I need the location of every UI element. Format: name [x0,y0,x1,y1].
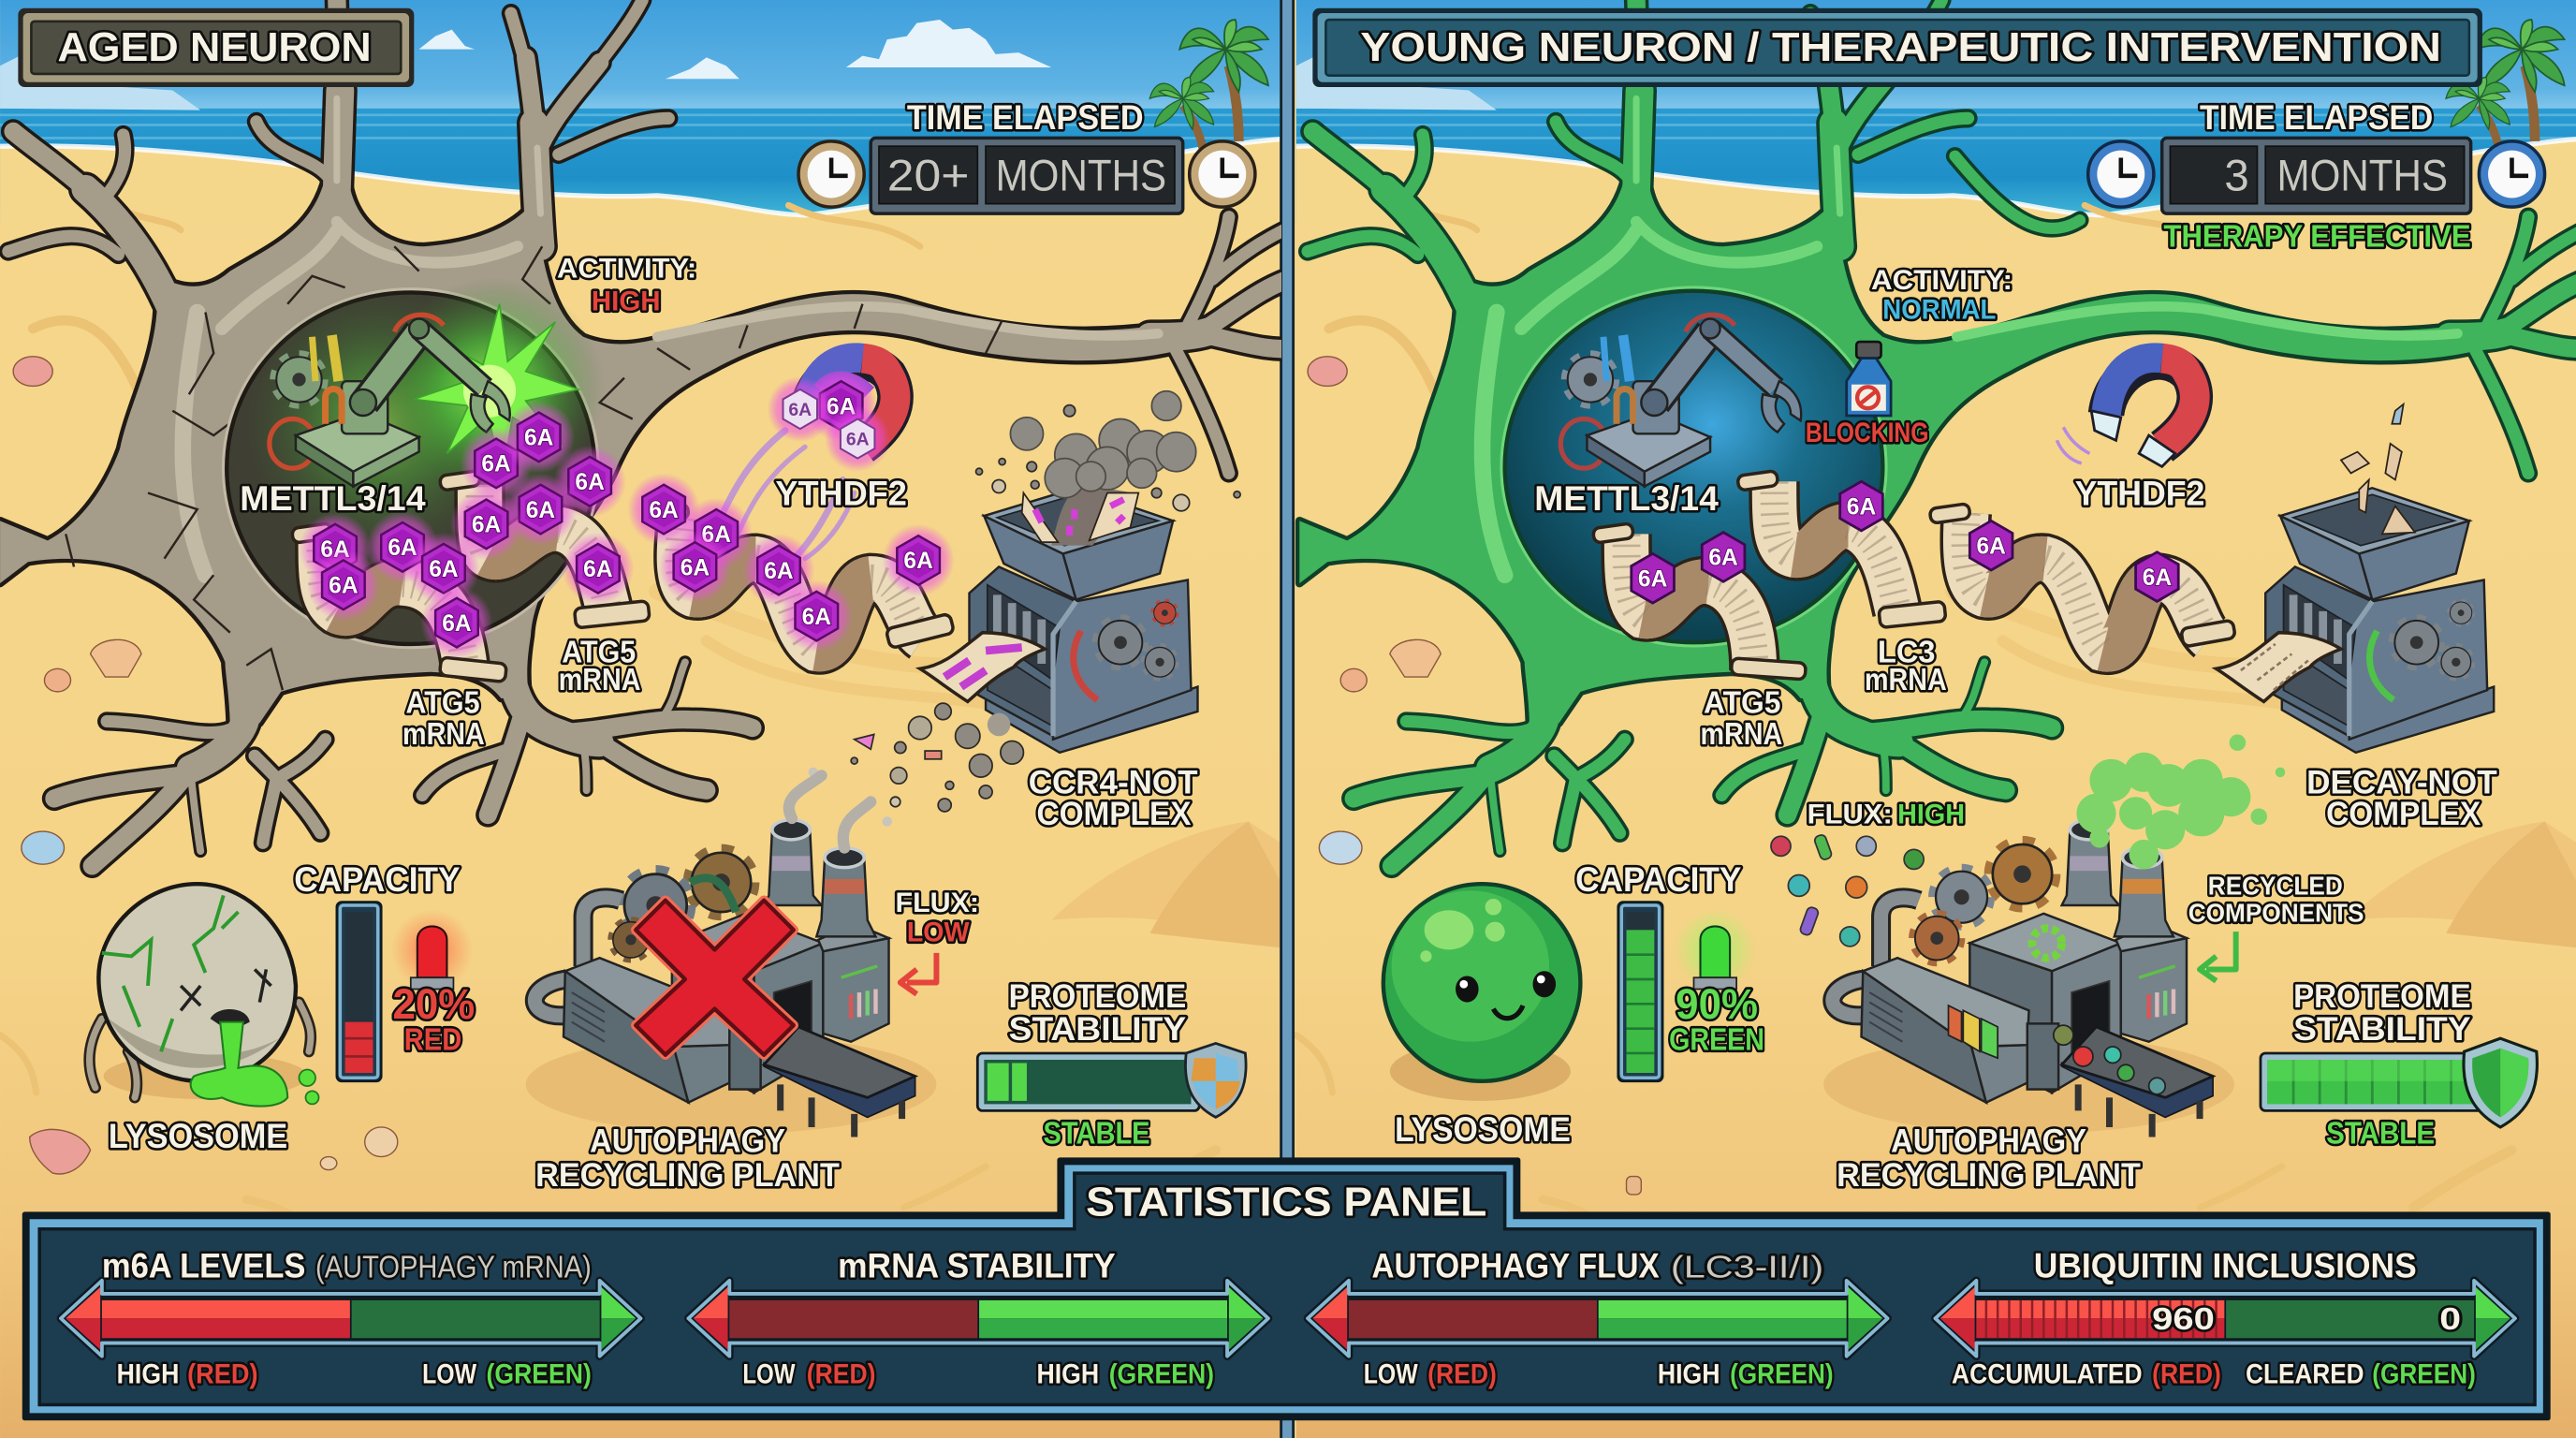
slime drip [191,1022,287,1107]
smoke from shredder left [1010,391,1196,546]
labels: molecules left: COMPLEX [1036,796,1192,832]
capacity gauge: young: GREEN [1669,1022,1764,1057]
6A markers left: 6A [802,605,831,630]
6A markers left [299,370,955,659]
clock icon [2088,141,2154,207]
conveyor items [2054,1025,2165,1094]
clock icon [2479,141,2545,207]
6A markers left: 6A [524,426,554,451]
mRNA scrolls left [291,471,954,682]
smoke grey [789,775,871,848]
plant labels left: FLUX: [896,888,979,918]
6A markers left: 6A [329,574,359,599]
stat: m6A levels: (RED) [187,1359,258,1390]
labels: molecules right: METTL3/14 [1534,479,1719,518]
labels: molecules left [240,475,1198,832]
stat: autophagy flux: HIGH [1658,1359,1720,1390]
autophagy plant: aged, halted [526,775,936,1137]
stat: mRNA stability: (RED) [807,1359,875,1390]
stat: ubiquitin inclusions: (RED) [2152,1359,2221,1390]
stat: mRNA stability [688,1247,1268,1390]
6A markers right: 6A [1638,567,1668,593]
stat: ubiquitin inclusions: UBIQUITIN INCLUSIONS [2034,1247,2417,1285]
shield icon [1185,1043,1246,1117]
proteome stability: aged: STABLE [1044,1116,1150,1151]
colored blocks [1949,1005,1998,1058]
stat: mRNA stability: LOW [742,1359,796,1390]
6A markers left: 6A [903,549,933,574]
stat: m6A levels [61,1247,641,1390]
activity label right: ACTIVITY: [1871,265,2012,296]
activity label left: ACTIVITY: [557,254,696,285]
shield icon [2464,1038,2537,1127]
labels: molecules right: LC3 [1878,635,1935,669]
labels: molecules right: COMPLEX [2326,796,2481,832]
labels: molecules left: mRNA [402,717,485,752]
stat: autophagy flux: (RED) [1427,1359,1497,1390]
clock icon [1190,141,1255,207]
6A markers left: 6A [583,557,613,582]
labels: molecules right: ATG5 [1704,686,1781,721]
6A markers left: 6A [788,401,812,420]
lysosome: aged, cracked and leaking [89,884,319,1155]
stat: autophagy flux: AUTOPHAGY FLUX [1372,1247,1660,1285]
plant labels right [1808,799,2364,1194]
banner: aged neuron [18,8,414,87]
proteome stability: young: STABLE [2326,1116,2435,1151]
6A markers right: 6A [1847,494,1876,520]
plant labels right: COMPONENTS [2188,899,2364,928]
title right: YOUNG NEURON / THERAPEUTIC INTERVENTION [1360,24,2441,70]
labels: molecules left: YTHDF2 [775,475,907,513]
neuron: young, healthy green [1299,0,2576,866]
6A markers left: 6A [846,431,870,450]
mRNA scrolls right [1592,471,2235,680]
stat: ubiquitin inclusions: 960 [2152,1302,2215,1337]
6A markers left: 6A [320,537,350,563]
labels: molecules left: CCR4-NOT [1029,765,1198,801]
banner: young neuron [1312,8,2482,87]
double arrow bar [1935,1281,2515,1357]
plant labels right: AUTOPHAGY [1891,1123,2086,1159]
shredder: decay-not young [2265,488,2494,753]
timer: aged: TIME ELAPSED [907,98,1144,137]
double arrow bar [1308,1281,1888,1357]
robot arm: METTL3/14 young [1560,315,1801,486]
stat: ubiquitin inclusions [1935,1247,2515,1390]
proteome stability: aged: STABILITY [1009,1011,1186,1048]
proteome stability: young: STABILITY [2293,1011,2471,1048]
labels: molecules right: YTHDF2 [2075,475,2204,513]
capacity gauge: young: 90% [1676,980,1758,1028]
stat: ubiquitin inclusions: 0 [2439,1302,2461,1337]
capacity gauge: young [1575,860,1764,1081]
green smoke [2076,734,2285,869]
6A markers left: 6A [575,470,605,495]
stat: autophagy flux: LOW [1364,1359,1418,1390]
timer: young: MONTHS [2277,152,2448,201]
robot arm: METTL3/14 aged [270,315,510,486]
nucleus: young, blue [1500,286,1888,647]
timer: young: 3 [2224,152,2249,201]
6A markers right [1632,481,2178,603]
recycled components [1771,833,1924,946]
capacity gauge: aged: RED [404,1022,461,1057]
stat: m6A levels: m6A LEVELS [102,1247,305,1285]
6A markers left: 6A [764,559,794,584]
plant labels right: RECYCLED [2208,872,2343,901]
6A markers right: 6A [1708,546,1738,571]
blocking label: BLOCKING [1806,418,1928,448]
activity label left: HIGH [592,286,661,317]
clock icon [798,141,864,207]
6A markers left: 6A [481,452,511,477]
6A markers left: 6A [702,522,731,548]
magnet trails left [710,431,855,566]
left panel background: sky, sea and beach [0,0,1298,1438]
6A markers left: 6A [827,394,856,419]
proteome stability: young [2261,978,2537,1151]
nucleus: aged, dark with green glow [222,287,600,649]
6A markers left: 6A [442,611,472,637]
plant labels right: RECYCLING PLANT [1837,1157,2141,1194]
red gear and arrow [1074,601,1177,700]
lysosome label: LYSOSOME [1395,1110,1571,1149]
exiting scroll left [920,633,1045,701]
scrap paper in hopper left [1022,493,1138,542]
green gear emblem [2032,929,2062,958]
labels: molecules right: DECAY-NOT [2306,765,2497,801]
proteome stability: aged: PROTEOME [1009,978,1186,1015]
stat: ubiquitin inclusions: (GREEN) [2372,1359,2476,1390]
stat: mRNA stability: mRNA STABILITY [838,1247,1116,1285]
statistics panel [24,1160,2548,1418]
timer: young [2088,98,2545,254]
plant labels left: RECYCLING PLANT [535,1157,840,1194]
stat: ubiquitin inclusions: CLEARED [2246,1359,2364,1390]
autophagy plant: young, running [1771,734,2285,1137]
right panel background: sky, sea and beach [1296,0,2576,1438]
therapy label: THERAPY EFFECTIVE [2163,219,2471,254]
timer: aged [798,98,1255,213]
proteome stability: aged [977,978,1246,1151]
stat: mRNA stability: HIGH [1036,1359,1099,1390]
exiting scroll right [2217,633,2341,701]
stat: m6A levels: HIGH [117,1359,179,1390]
activity label left [557,254,696,317]
stat: m6A levels: LOW [422,1359,477,1390]
timer: aged: MONTHS [996,152,1166,201]
labels: molecules right: mRNA [1865,663,1947,697]
shredder: CCR4-NOT aged [970,488,1197,753]
labels: molecules left: ATG5 [406,686,480,721]
6A markers right: 6A [1976,534,2006,559]
arrow: low flux [900,953,936,994]
double arrow bar [688,1281,1268,1357]
shells [13,357,1641,1195]
6A markers left: 6A [388,536,417,561]
neuron: aged, cracked grey [0,0,1298,866]
icon: green energy burst [381,278,605,501]
centre divider [1280,0,1295,1438]
plant labels right: HIGH [1897,799,1965,829]
arrow: recycled return [2200,932,2236,981]
alarm green [1674,909,1756,990]
plant labels right: FLUX: [1808,799,1893,829]
icon: magnet YTHDF2 left [807,358,896,447]
proteome stability: young: PROTEOME [2293,978,2471,1015]
capacity gauge: aged: 20% [393,980,475,1028]
stat: m6A levels: (AUTOPHAGY mRNA) [315,1251,592,1285]
labels: molecules left: METTL3/14 [240,479,426,518]
timer: aged: 20+ [887,152,970,201]
stat: ubiquitin inclusions: ACCUMULATED [1952,1359,2143,1390]
labels: molecules right [1534,475,2497,832]
capacity gauge: aged: CAPACITY [294,860,460,899]
stat: autophagy flux [1308,1247,1888,1390]
6A markers right: 6A [2143,565,2172,591]
double arrow bar [61,1281,641,1357]
red cross [636,901,794,1055]
panel heading: STATISTICS PANEL [1086,1180,1486,1225]
stat: autophagy flux: (LC3-II/I) [1671,1251,1823,1285]
6A markers left: 6A [472,513,502,538]
activity label right [1871,265,2012,325]
plant labels left: LOW [907,917,970,948]
plant labels left: AUTOPHAGY [590,1123,785,1159]
timer: young: TIME ELAPSED [2200,98,2433,137]
capacity gauge: aged [294,860,475,1081]
labels: molecules left: ATG5 [562,635,636,669]
debris left [809,405,1240,827]
stat: m6A levels: (GREEN) [487,1359,592,1390]
capacity gauge: young: CAPACITY [1575,860,1741,899]
stat: autophagy flux: (GREEN) [1730,1359,1834,1390]
plant labels left [535,888,979,1194]
labels: molecules right: mRNA [1701,717,1782,752]
labels: molecules left: mRNA [559,663,641,697]
icon: blocker bottle [1806,342,1928,448]
lysosome label: LYSOSOME [109,1117,287,1155]
green arrow [2370,631,2393,700]
activity label right: NORMAL [1882,294,1996,325]
title left: AGED NEURON [57,24,372,70]
icon: magnet YTHDF2 right [2056,358,2195,466]
6A markers left: 6A [649,498,679,523]
lysosome: young, smiling [1383,884,1580,1149]
alarm red [391,909,474,990]
6A markers left: 6A [681,555,710,580]
scrap paper above hopper right [2341,404,2415,534]
6A markers left: 6A [429,557,459,582]
cracks [66,246,1003,690]
6A markers left: 6A [526,498,555,523]
stat: mRNA stability: (GREEN) [1109,1359,1214,1390]
